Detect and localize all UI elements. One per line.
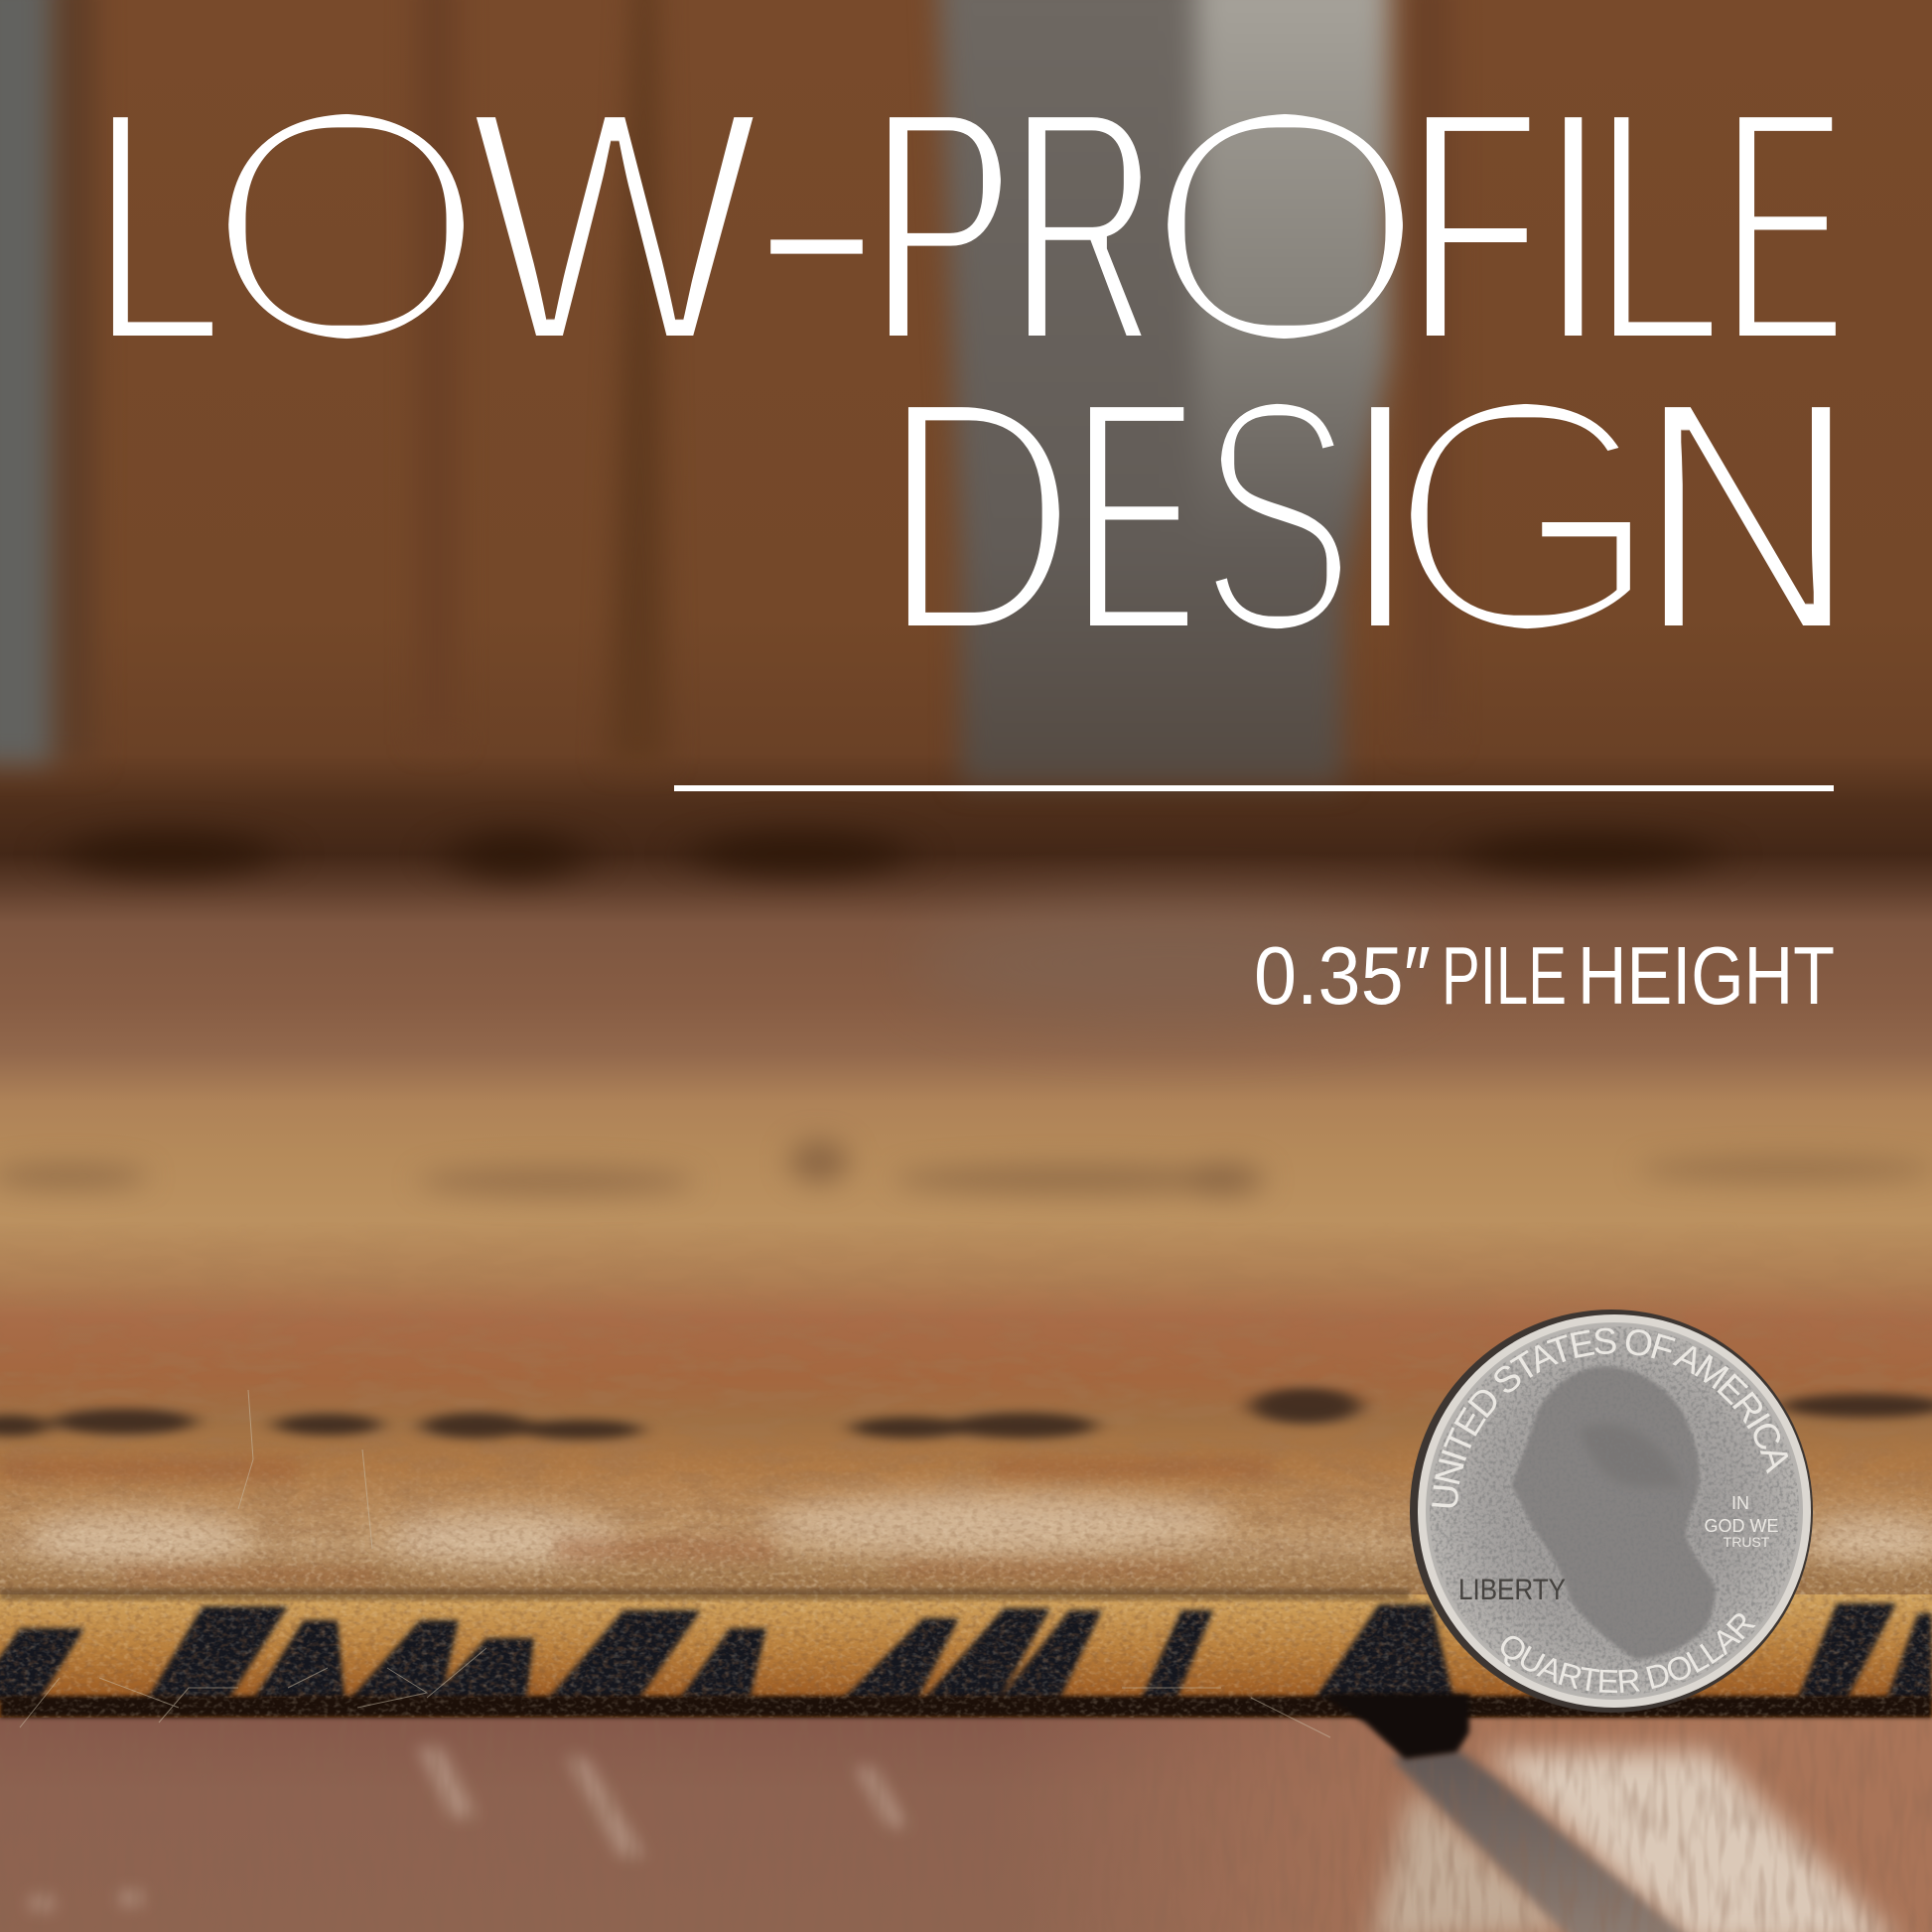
reddish rug mottling xyxy=(0,1459,1271,1581)
wooden floor xyxy=(0,1714,1932,1932)
coin shadow xyxy=(1320,1694,1469,1759)
heading line 2: I xyxy=(1341,330,1419,703)
heading line 1: P xyxy=(871,40,1013,413)
braid dark stripes xyxy=(0,1603,1932,1702)
heading rule xyxy=(674,785,1834,791)
heading line 2: N xyxy=(1635,330,1860,703)
heading line 2 xyxy=(883,330,1860,703)
floor light and shadow xyxy=(1370,1752,1900,1932)
stray jute hairs xyxy=(20,1390,1330,1737)
low frequency rug mottling xyxy=(0,1497,1411,1549)
heading line 1: O xyxy=(1141,40,1430,413)
heading line 1: W xyxy=(468,40,764,413)
coin lettering: GOD WE xyxy=(1704,1516,1779,1536)
heading line 1: L xyxy=(1590,40,1724,413)
blurred wall and window xyxy=(0,0,1449,784)
coin lettering xyxy=(1432,1328,1789,1694)
heading line 1: - xyxy=(749,34,885,407)
braid fibre texture xyxy=(0,1594,1932,1698)
heading: LOW-PROFILE DESIGN xyxy=(89,34,1860,703)
heading line 1 xyxy=(89,34,1845,413)
floor grain xyxy=(0,1714,1932,1932)
coin lettering: IN xyxy=(1731,1493,1749,1513)
coin lettering: TRUST xyxy=(1724,1534,1770,1550)
heading line 1: O xyxy=(202,40,490,413)
subheading: pile height: PILE xyxy=(1442,929,1567,1022)
blurred rug stripes xyxy=(0,1140,1932,1195)
heading line 2: E xyxy=(1074,330,1196,703)
heading line 2: S xyxy=(1198,330,1355,703)
pale floor reflection xyxy=(913,903,1430,1023)
heading line 1: L xyxy=(89,40,224,413)
heading line 1: F xyxy=(1408,40,1539,413)
coin lettering: LIBERTY xyxy=(1458,1574,1566,1606)
dark skirting shadows xyxy=(60,830,1718,882)
braid top trim xyxy=(0,1588,1410,1600)
coin texture xyxy=(1430,1326,1799,1696)
portrait bust xyxy=(1509,1365,1718,1661)
blurred cream patches on rug xyxy=(25,1494,1932,1566)
heading line 1: R xyxy=(1011,40,1157,413)
subheading: pile height: 0.35″ xyxy=(1254,929,1431,1022)
subheading: pile height: HEIGHT xyxy=(1578,929,1835,1022)
heading line 1: I xyxy=(1536,40,1610,413)
coin lettering: UNITED STATES OF AMERICA xyxy=(1432,1328,1789,1507)
rug braided edge xyxy=(0,1390,1932,1737)
braid base shadow xyxy=(0,1696,1932,1718)
heading line 2: G xyxy=(1384,330,1666,703)
blurred rug dark motif xyxy=(0,1388,1932,1440)
quarter dollar coin xyxy=(1410,1310,1813,1713)
heading line 2: D xyxy=(883,330,1076,703)
rug fibre texture xyxy=(0,1473,1932,1594)
coin lettering: QUARTER DOLLAR xyxy=(1501,1613,1755,1694)
